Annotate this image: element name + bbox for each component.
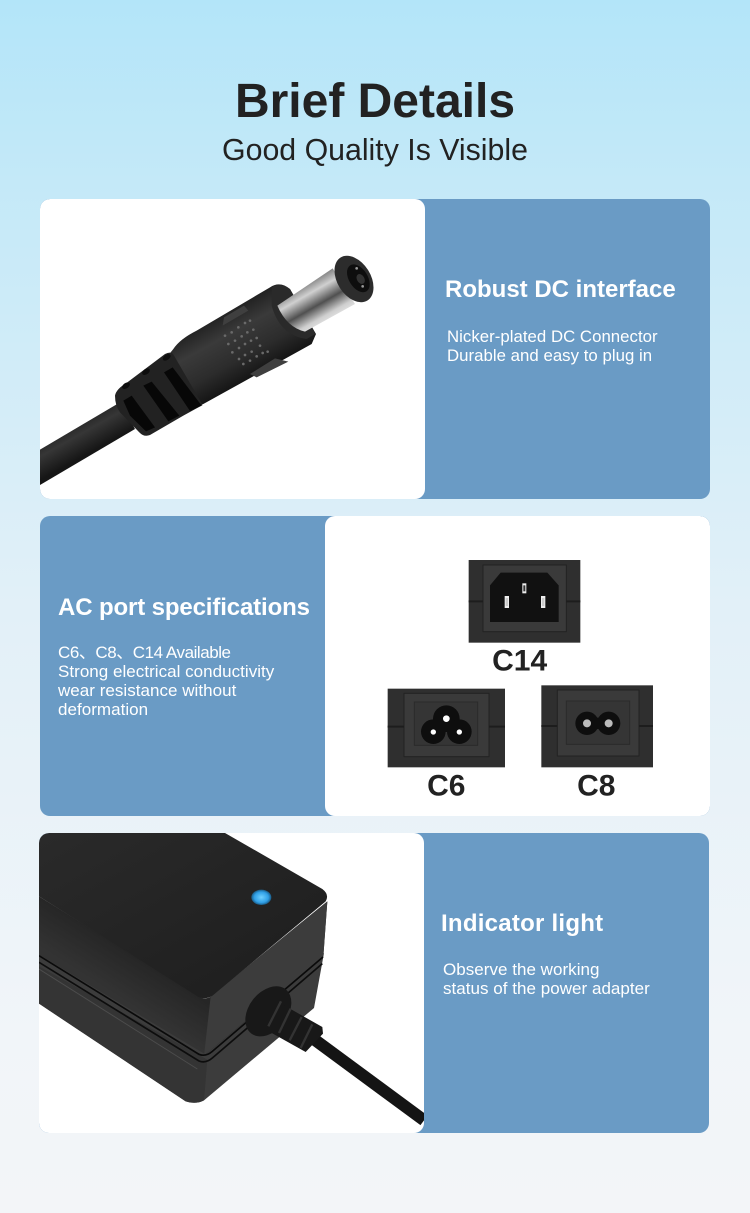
C14 socket [469, 560, 580, 643]
panel: Robust DC interface [40, 199, 710, 499]
cable [40, 402, 135, 485]
metal barrel [277, 268, 355, 332]
adapter top face [39, 833, 327, 998]
description: Observe the working [443, 960, 599, 979]
collar [272, 285, 315, 339]
C6 socket [388, 689, 505, 767]
heading: Indicator light [441, 910, 603, 937]
description: deformation [58, 700, 148, 719]
panel: AC port specifications [40, 516, 710, 816]
connector tip [326, 249, 382, 309]
photo: DC connector [40, 199, 425, 499]
grip dots [224, 319, 269, 365]
indicator LED [251, 890, 271, 905]
heading: AC port specifications [58, 594, 310, 621]
title: Brief Details [235, 75, 515, 128]
description: wear resistance without [58, 681, 236, 700]
connector diagrams [325, 516, 710, 816]
description [443, 960, 650, 998]
seam [39, 956, 323, 1055]
subtitle: Good Quality Is Visible [222, 134, 528, 167]
label: C8: C8 [577, 769, 616, 802]
strain relief [115, 353, 203, 436]
C8 socket [541, 685, 653, 767]
description [447, 327, 658, 365]
heading: Robust DC interface [445, 276, 676, 303]
cable [312, 1038, 424, 1120]
description: Durable and easy to plug in [447, 346, 652, 365]
description: Nicker-plated DC Connector [447, 327, 658, 346]
adapter lower shell [39, 950, 324, 1103]
strain relief [236, 977, 323, 1052]
label: C6: C6 [427, 769, 466, 802]
description [58, 643, 274, 719]
photo: power adapter [39, 833, 424, 1133]
description: Strong electrical conductivity [58, 662, 274, 681]
description: C6、C8、C14 Available [58, 643, 231, 662]
panel: Indicator light [39, 833, 709, 1133]
label: C14: C14 [492, 644, 547, 677]
adapter front side [39, 896, 327, 1055]
description: status of the power adapter [443, 979, 650, 998]
body [160, 284, 316, 406]
